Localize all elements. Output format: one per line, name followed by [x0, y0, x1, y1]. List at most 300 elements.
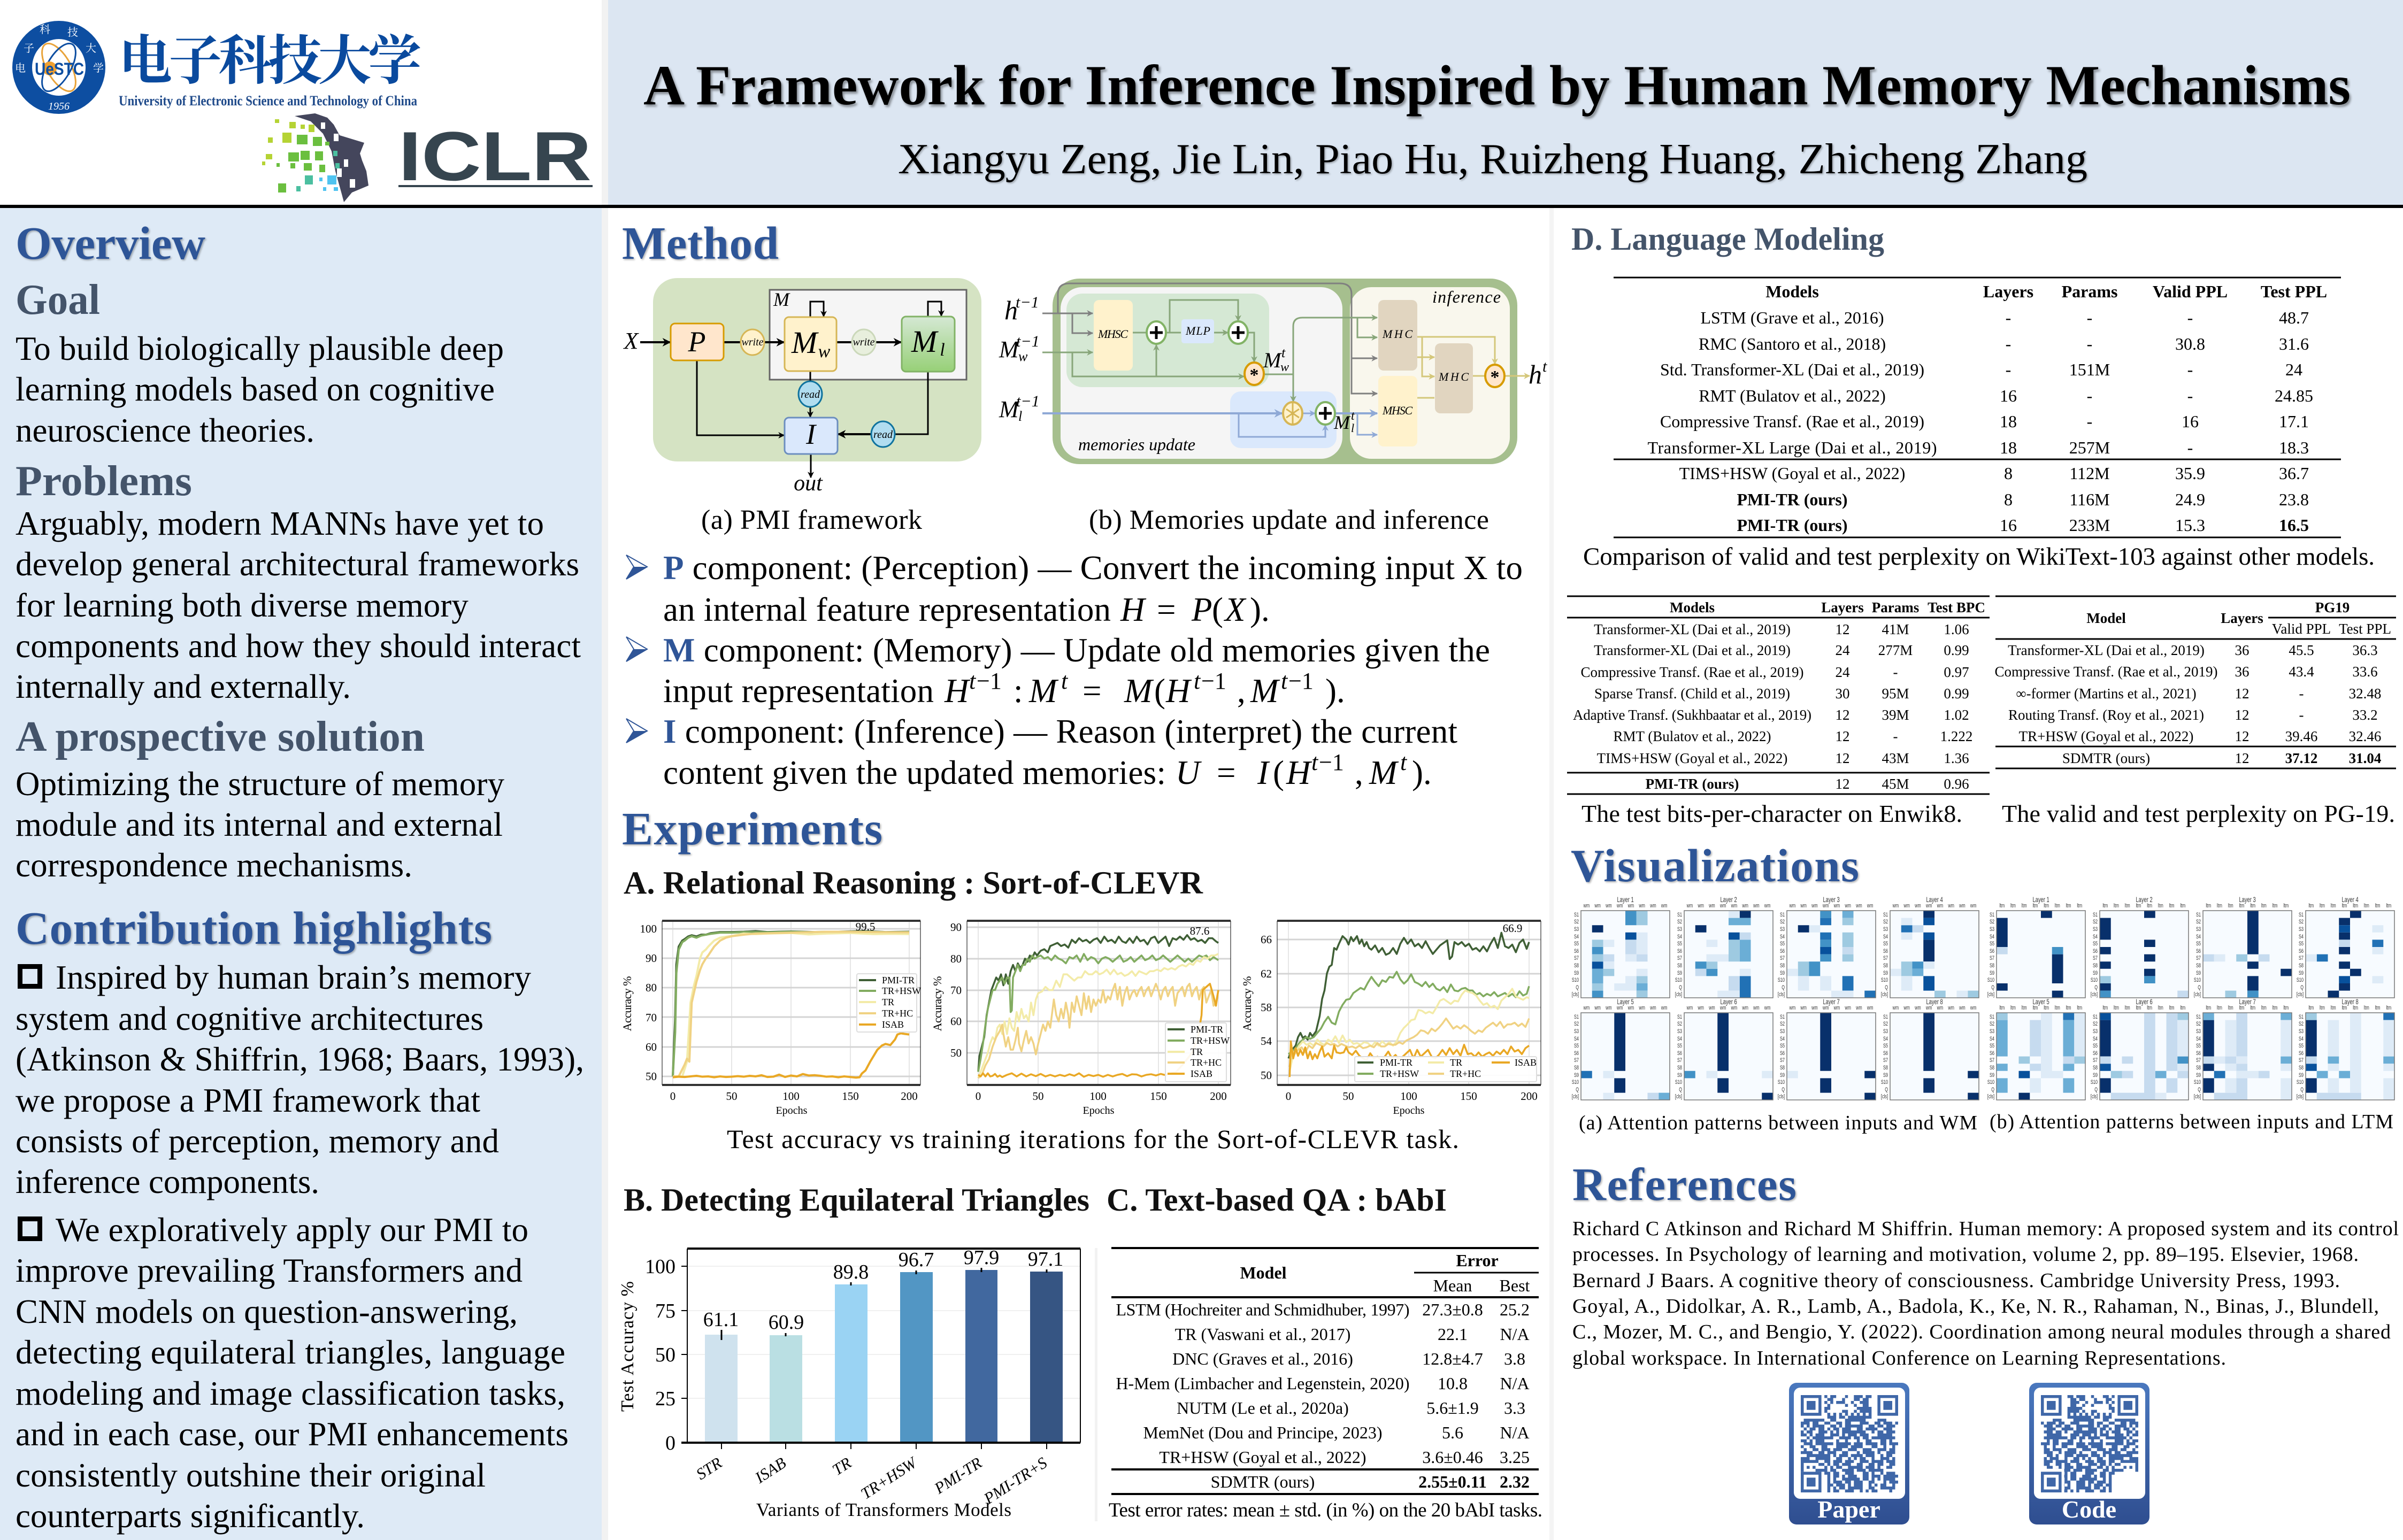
bar chart: transformer variants: 97.1 [1028, 1248, 1063, 1270]
diagram: PMI framework: write [741, 336, 764, 348]
heatmap: LTM layer 6: Layer 6 [2136, 997, 2153, 1006]
header left white area [0, 0, 602, 205]
table: bAbI: Best [1500, 1276, 1530, 1295]
heatmap: LTM layer 8: S9 [2299, 1072, 2304, 1078]
heading: experiments: Experiments [622, 803, 882, 854]
heatmap: LTM layer 3: S1 [2196, 912, 2201, 918]
table: PG-19: Transformer-XL (Dai et al., 2019) [2008, 642, 2205, 658]
contribution 1 [16, 959, 584, 1200]
bullet: M component: t [1194, 668, 1201, 694]
right column separator [1549, 208, 1554, 1540]
heatmap: WM layer 3: S2 [1780, 919, 1785, 925]
panel: overview [16, 217, 584, 1535]
caption: Enwik8: The test bits-per-character on Enwik8. [1581, 800, 1962, 827]
heatmap: LTM layer 5: S10 [1987, 1079, 1994, 1085]
heatmap: LTM layer 1: S5 [1990, 941, 1994, 946]
heatmap: WM layer 3: S7 [1780, 955, 1785, 961]
table: bAbI: 3.6±0.46 [1422, 1447, 1483, 1467]
heatmap: WM layer 6: [cls] [1675, 1094, 1682, 1099]
goal block: learning models based on cognitive [16, 371, 495, 408]
table: WikiText-103: - [2187, 308, 2193, 327]
table: PG-19: 37.12 [2285, 750, 2317, 766]
heatmap: WM layer 5 [1572, 997, 1670, 1100]
heading: visualizations: Visualizations [1571, 840, 1859, 891]
heatmap: WM layer 7: Q [1782, 1087, 1785, 1092]
bullet: I component: H [1286, 754, 1312, 791]
table: Enwik8: Sparse Transf. (Child et al., 2019) [1594, 686, 1790, 702]
line chart 1: 100 [640, 922, 657, 935]
heatmap: LTM layer 6: S3 [2093, 1028, 2098, 1034]
table: Enwik8: 24 [1836, 664, 1850, 680]
heatmap: LTM layer 6: S6 [2093, 1050, 2098, 1056]
diagram: memories update and inference: t−1 [1016, 392, 1040, 410]
diagram: PMI framework: X [623, 328, 640, 354]
heatmap: LTM layer 8: [cls] [2297, 1094, 2304, 1099]
line chart 3: 62 [1261, 967, 1272, 980]
table: WikiText-103: 18.3 [2279, 438, 2309, 457]
bar chart: transformer variants: 75 [655, 1300, 675, 1322]
heatmap: LTM layer 8: S1 [2299, 1014, 2304, 1020]
heatmap: LTM layer 7: ltm ltm ltm ltm ltm ltm ltm ltm [2206, 1005, 2289, 1011]
diagram: memories update and inference: h [1529, 359, 1542, 389]
diagram: memories update and inference: M [1263, 348, 1283, 372]
heatmap: WM layer 3: S9 [1780, 970, 1785, 976]
table: Enwik8: - [1893, 664, 1898, 680]
bullet: I component: I [1257, 754, 1270, 791]
heatmap: LTM layer 5: S1 [1990, 1014, 1994, 1020]
bar chart: transformer variants: 25 [655, 1388, 675, 1410]
heatmap: WM layer 1: S10 [1572, 977, 1579, 983]
contribution 1: Inspired by human brain’s memory [56, 959, 532, 996]
table: Enwik8: Adaptive Transf. (Sukhbaatar et al., 2019) [1573, 707, 1811, 723]
QR card: paper [1789, 1383, 1909, 1524]
heatmap: LTM layer 2: Layer 2 [2136, 895, 2153, 904]
table: Enwik8: Layers [1821, 599, 1864, 615]
heatmap: WM layer 3: S5 [1780, 941, 1785, 946]
heatmap: WM layer 2: S6 [1677, 948, 1682, 954]
heatmap: WM layer 3: wm wm wm wm wm wm wm wm [1789, 903, 1873, 908]
heatmap: WM layer 4 [1881, 895, 1979, 998]
bar chart: transformer variants: TR+HSW [858, 1453, 921, 1503]
bullet: M component: H [944, 672, 971, 710]
table: WikiText-103: - [2087, 308, 2092, 327]
heatmap: LTM layer 6: S8 [2093, 1065, 2098, 1071]
heatmap: LTM layer 6: [cls] [2091, 1094, 2098, 1099]
line chart 3: 54 [1261, 1035, 1272, 1048]
problems block: components and how they should interact [16, 627, 581, 665]
heatmap: WM layer 6: S9 [1677, 1072, 1682, 1078]
table: Enwik8: 0.96 [1944, 776, 1969, 792]
table: WikiText-103: 15.3 [2175, 515, 2205, 535]
table: Enwik8: 0.97 [1944, 664, 1969, 680]
heatmap: LTM layer 3: S6 [2196, 948, 2201, 954]
table: Enwik8: 0.99 [1944, 642, 1969, 658]
line chart 2: 50 [1032, 1090, 1044, 1103]
table: PG-19: PG19 [2315, 599, 2350, 615]
bullet: M component: , [1237, 672, 1246, 710]
heatmap: LTM layer 3: Layer 3 [2239, 895, 2256, 904]
diagram: memories update and inference: M [1333, 412, 1351, 433]
bar chart: transformer variants: 50 [655, 1344, 675, 1366]
bullet: I component: = [1217, 754, 1236, 791]
heatmap: WM layer 2: S3 [1677, 926, 1682, 932]
bullet: I component: , [1355, 754, 1363, 791]
heatmap: LTM layer 1 [1987, 895, 2085, 998]
bar chart: transformer variants: 60.9 [769, 1311, 804, 1334]
heatmap: WM layer 8: Q [1885, 1087, 1888, 1092]
table: Enwik8: Transformer-XL (Dai et al., 2019) [1594, 621, 1791, 637]
diagram: memories update and inference [999, 279, 1547, 464]
heatmap: LTM layer 7: S2 [2196, 1021, 2201, 1027]
heatmap: WM layer 1: S8 [1574, 962, 1579, 968]
heatmap: WM layer 8: S7 [1883, 1057, 1888, 1063]
table: WikiText-103: 16 [2182, 412, 2199, 431]
bar chart: transformer variants [618, 1246, 1080, 1520]
table: WikiText-103: 24.85 [2275, 386, 2313, 405]
table: WikiText-103: 257M [2069, 438, 2110, 457]
table: bAbI: 3.8 [1504, 1349, 1525, 1368]
bar chart: transformer variants: Variants of Transformers Models [756, 1499, 1011, 1520]
heatmap: LTM layer 5: ltm ltm ltm ltm ltm ltm ltm ltm [1999, 1005, 2082, 1011]
heatmap: LTM layer 7 [2194, 997, 2292, 1100]
diagram: PMI framework: w [818, 342, 831, 361]
legend [857, 974, 921, 1032]
table: bAbI: N/A [1500, 1325, 1530, 1344]
heatmap: LTM layer 8: S10 [2297, 1079, 2304, 1085]
university name chinese: 电子科技大学 [119, 18, 421, 95]
heatmap: WM layer 5: S4 [1574, 1036, 1579, 1042]
heatmap: WM layer 1: wm wm wm wm wm wm wm wm [1583, 903, 1667, 908]
diagram: PMI framework: M [773, 289, 790, 310]
bullet: I component: content given the updated memories: [663, 754, 1166, 791]
diagram: memories update and inference: h [1004, 295, 1018, 325]
heatmap: LTM layer 7: Layer 7 [2239, 997, 2256, 1006]
heatmap: WM layer 6: S1 [1677, 1014, 1682, 1020]
references list: Goyal, A., Didolkar, A. R., Lamb, A., Badola, K., Ke, N. R., Rahaman, N., Binas, J., Blundell, [1572, 1295, 2379, 1318]
heatmap: WM layer 6: S5 [1677, 1043, 1682, 1049]
contribution 2: improve prevailing Transformers and [16, 1252, 523, 1289]
heatmap: WM layer 4: S5 [1883, 941, 1888, 946]
heatmap: LTM layer 4: S5 [2299, 941, 2304, 946]
bullet: P component: an internal feature representation [663, 591, 1111, 628]
table: bAbI: SDMTR (ours) [1211, 1472, 1315, 1491]
heatmap: LTM layer 7: S1 [2196, 1014, 2201, 1020]
table: bAbI: 2.32 [1500, 1472, 1530, 1491]
heatmap: WM layer 8: S5 [1883, 1043, 1888, 1049]
QR card: paper: Paper [1817, 1496, 1880, 1523]
bar chart: transformer variants: Test Accuracy % [618, 1281, 638, 1412]
references list: Bernard J Baars. A cognitive theory of consciousness. Cambridge University Press, 1993. [1572, 1269, 2340, 1292]
diagram: PMI framework: read [873, 429, 893, 441]
heatmap: LTM layer 2: Q [2094, 984, 2098, 990]
table: WikiText-103: 30.8 [2175, 334, 2205, 353]
bar chart: transformer variants: PMI-TR [931, 1454, 985, 1498]
heatmap: WM layer 3: S6 [1780, 948, 1785, 954]
table: WikiText-103: RMT (Bulatov et al., 2022) [1699, 386, 1886, 405]
bullet: I component: ( [1273, 754, 1284, 791]
heatmap: WM layer 6: S2 [1677, 1021, 1682, 1027]
heatmap: WM layer 7: wm wm wm wm wm wm wm wm [1789, 1005, 1873, 1011]
table: PG-19: 43.4 [2289, 664, 2314, 680]
table: bAbI: 25.2 [1500, 1300, 1530, 1319]
bar chart: transformer variants: 0 [665, 1432, 675, 1454]
bar chart: transformer variants: 100 [645, 1256, 675, 1278]
heatmap: LTM layer 4: Layer 4 [2341, 895, 2359, 904]
table: WikiText-103: - [2187, 438, 2193, 457]
diagram: memories update and inference: MHSC [1382, 404, 1412, 417]
heatmap: LTM layer 3: S2 [2196, 919, 2201, 925]
bullet: P component: H [1120, 591, 1147, 628]
contribution 2: CNN models on question-answering, [16, 1293, 518, 1330]
table: Enwik8: - [1893, 728, 1898, 744]
diagram: memories update and inference: M [999, 396, 1020, 422]
heatmap: WM layer 8: S1 [1883, 1014, 1888, 1020]
bullet: P component: P component: (Perception) — Convert the incoming input X to [663, 549, 1523, 587]
line chart 3: Accuracy % [1240, 976, 1254, 1031]
icon: head [262, 113, 368, 202]
table: PG-19: ∞-former (Martins et al., 2021) [2016, 686, 2197, 702]
heatmap: WM layer 2: Q [1679, 984, 1682, 990]
line chart 1: Epochs [776, 1105, 808, 1116]
legend: TR+HSW [1191, 1035, 1230, 1046]
heatmap: WM layer 8: S6 [1883, 1050, 1888, 1056]
table: WikiText-103: 18 [2000, 438, 2017, 457]
heatmap: WM layer 3: S8 [1780, 962, 1785, 968]
contribution 1: consists of perception, memory and [16, 1122, 499, 1160]
table: PG-19: Valid PPL [2272, 621, 2331, 637]
subheading A: A. Relational Reasoning : Sort-of-CLEVR [624, 865, 1203, 900]
table: Enwik8: TIMS+HSW (Goyal et al., 2022) [1597, 750, 1787, 766]
heatmap: WM layer 5: S6 [1574, 1050, 1579, 1056]
table: WikiText-103: 48.7 [2279, 308, 2309, 327]
table: Enwik8: 24 [1836, 642, 1850, 658]
heatmap: LTM layer 3: Q [2198, 984, 2201, 990]
method component bullets [626, 549, 1523, 791]
heatmap: LTM layer 5: S5 [1990, 1043, 1994, 1049]
bullet: M component: −1 [1201, 668, 1226, 694]
heatmap: LTM layer 5: S8 [1990, 1065, 1994, 1071]
table: PG-19 [1995, 596, 2396, 768]
goal block: Goal [16, 276, 100, 324]
line chart 2: 80 [950, 952, 962, 965]
line chart 2: 70 [950, 984, 962, 997]
diagram: PMI framework: I [805, 418, 817, 450]
heatmap: LTM layer 1: S6 [1990, 948, 1994, 954]
table: bAbI: LSTM (Hochreiter and Schmidhuber, 1997) [1116, 1300, 1410, 1319]
heatmap: WM layer 6: Q [1679, 1087, 1682, 1092]
contribution 1: inference components. [16, 1163, 319, 1200]
bullet: M component: M [1124, 672, 1154, 710]
heatmap: WM layer 3: S1 [1780, 912, 1785, 918]
table: bAbI: Model [1240, 1263, 1287, 1282]
title: A Framework for Inference Inspired by Human Memory Mechanisms [643, 54, 2351, 117]
heatmap: WM layer 5: wm wm wm wm wm wm wm wm [1583, 1005, 1667, 1011]
line chart 2: 60 [950, 1015, 962, 1028]
line chart 2: 90 [950, 921, 962, 934]
heatmap: LTM layer 1: [cls] [1987, 991, 1994, 997]
table: bAbI: TR+HSW (Goyal et al., 2022) [1159, 1447, 1366, 1467]
heatmap: WM layer 7 [1778, 997, 1876, 1100]
heatmap: LTM layer 5: S2 [1990, 1021, 1994, 1027]
heatmap: LTM layer 2: S8 [2093, 962, 2098, 968]
line chart 1: 100 [782, 1090, 800, 1103]
table: Enwik8: 39M [1882, 707, 1909, 723]
subheading C: C. Text-based QA : bAbI [1107, 1182, 1447, 1218]
heatmap: WM layer 4: S9 [1883, 970, 1888, 976]
heatmap: WM layer 7: S4 [1780, 1036, 1785, 1042]
line chart 3: 66 [1261, 933, 1272, 946]
table: WikiText-103: 233M [2069, 515, 2110, 535]
table: Enwik8: RMT (Bulatov et al., 2022) [1614, 728, 1771, 744]
table: Enwik8: 1.02 [1944, 707, 1969, 723]
bullet: M component: −1 [977, 668, 1002, 694]
table: Enwik8: 12 [1836, 621, 1849, 637]
heatmap: WM layer 5: [cls] [1572, 1094, 1579, 1099]
table: bAbI: TR (Vaswani et al., 2017) [1175, 1325, 1350, 1344]
seal: 技 [67, 26, 78, 38]
table: WikiText-103: Params [2062, 282, 2117, 301]
problems block: Arguably, modern MANNs have yet to [16, 505, 544, 542]
heatmap: LTM layer 2: S4 [2093, 934, 2098, 940]
heatmap: LTM layer 4: S3 [2299, 926, 2304, 932]
heatmap: WM layer 6: S8 [1677, 1065, 1682, 1071]
heatmap: LTM layer 1: S7 [1990, 955, 1994, 961]
line chart 3: Epochs [1393, 1105, 1425, 1116]
heatmap: WM layer 5: S10 [1572, 1079, 1579, 1085]
diagram: PMI framework: M [911, 324, 939, 359]
bullet: M component: −1 [1288, 668, 1314, 694]
contribution 2: and in each case, our PMI enhancements [16, 1415, 569, 1453]
table: PG-19: 32.48 [2349, 686, 2381, 702]
heatmap: WM layer 8: S4 [1883, 1036, 1888, 1042]
legend: TR+HC [1191, 1057, 1222, 1068]
heatmap: WM layer 1: [cls] [1572, 991, 1579, 997]
table: Enwik8: 1.36 [1944, 750, 1969, 766]
table: PG-19: Layers [2221, 610, 2263, 626]
table: Enwik8: 41M [1882, 621, 1909, 637]
caption: sort-of-CLEVR: Test accuracy vs training iterations for the Sort-of-CLEVR task. [727, 1124, 1459, 1154]
heatmap: WM layer 7: S9 [1780, 1072, 1785, 1078]
table: Enwik8: 277M [1878, 642, 1913, 658]
table: PG-19: 12 [2235, 707, 2250, 723]
heatmap: LTM layer 1: S3 [1990, 926, 1994, 932]
heatmap: LTM layer 4: S10 [2297, 977, 2304, 983]
prospective solution block: correspondence mechanisms. [16, 846, 412, 884]
legend: TR [1191, 1046, 1203, 1057]
heatmap: WM layer 8: S2 [1883, 1021, 1888, 1027]
table: bAbI: 22.1 [1438, 1325, 1468, 1344]
line chart 2: Epochs [1083, 1105, 1115, 1116]
heatmap: LTM layer 1: S8 [1990, 962, 1994, 968]
bullet: M component: M [1028, 672, 1059, 710]
legend: TR+HC [882, 1008, 913, 1019]
heatmap: WM layer 5: S7 [1574, 1057, 1579, 1063]
university name english: University of Electronic Science and Technology of China [119, 93, 417, 109]
heatmap: WM layer 4: S1 [1883, 912, 1888, 918]
divider [1095, 1248, 1097, 1521]
table: PG-19: Routing Transf. (Roy et al., 2021) [2008, 707, 2204, 723]
heatmap: WM layer 8: S9 [1883, 1072, 1888, 1078]
heatmap: WM layer 5: S5 [1574, 1043, 1579, 1049]
table: PG-19: 36.3 [2352, 642, 2378, 658]
heatmap: LTM layer 4 [2297, 895, 2394, 998]
heatmap: WM layer 3: [cls] [1778, 991, 1785, 997]
heatmap: LTM layer 3: S5 [2196, 941, 2201, 946]
legend: ISAB [1515, 1057, 1537, 1068]
heatmap: WM layer 7: S8 [1780, 1065, 1785, 1071]
heatmap: LTM layer 2: ltm ltm ltm ltm ltm ltm ltm ltm [2102, 903, 2185, 908]
subheading B: B. Detecting Equilateral Triangles [624, 1182, 1089, 1218]
table: PG-19: TR+HSW (Goyal et al., 2022) [2019, 728, 2193, 744]
diagram: memories update and inference: l [1018, 409, 1022, 424]
diagram: memories update and inference: t−1 [1016, 294, 1039, 311]
bar chart: transformer variants: 96.7 [899, 1249, 934, 1271]
table: WikiText-103: 8 [2004, 464, 2013, 483]
legend [1165, 1023, 1230, 1082]
table: PG-19: 32.46 [2349, 728, 2381, 744]
line chart 1: 50 [726, 1090, 737, 1103]
heatmap: WM layer 4: S3 [1883, 926, 1888, 932]
heatmap: LTM layer 6: S1 [2093, 1014, 2098, 1020]
bullet: P component: ( [1212, 591, 1223, 628]
diagram: PMI framework: l [940, 340, 945, 360]
table: WikiText-103: - [2187, 360, 2193, 379]
heatmap: LTM layer 5: [cls] [1987, 1094, 1994, 1099]
heatmap: LTM layer 4: [cls] [2297, 991, 2304, 997]
heatmap: WM layer 5: Layer 5 [1617, 997, 1634, 1006]
bullet: I component: I component: (Inference) — Reason (interpret) the current [663, 713, 1457, 750]
heatmap: LTM layer 2: S5 [2093, 941, 2098, 946]
table: WikiText-103: Layers [1983, 282, 2033, 301]
bullet: I component: ). [1412, 754, 1432, 791]
heatmap: LTM layer 6: S4 [2093, 1036, 2098, 1042]
contribution 2: We exploratively apply our PMI to [56, 1211, 528, 1249]
heatmap: WM layer 2: wm wm wm wm wm wm wm wm [1686, 903, 1770, 908]
heatmap: LTM layer 7: S7 [2196, 1057, 2201, 1063]
heatmap: WM layer 1: S5 [1574, 941, 1579, 946]
heatmap: WM layer 7: S7 [1780, 1057, 1785, 1063]
seal: 电 [15, 62, 26, 74]
table: WikiText-103: TIMS+HSW (Goyal et al., 2022) [1679, 464, 1905, 483]
heatmap: WM layer 1: Q [1576, 984, 1579, 990]
seal: 子 [24, 43, 34, 55]
heatmap: WM layer 7: Layer 7 [1823, 997, 1840, 1006]
diagram: memories update and inference: l [1351, 421, 1354, 435]
heatmap: WM layer 4: S8 [1883, 962, 1888, 968]
heatmap: WM layer 5: Q [1576, 1087, 1579, 1092]
table: bAbI: 3.25 [1500, 1447, 1530, 1467]
heatmap: LTM layer 7: S5 [2196, 1043, 2201, 1049]
table: WikiText-103: 16.5 [2279, 515, 2309, 535]
legend: ISAB [882, 1019, 904, 1030]
diagram: PMI framework: read [801, 389, 820, 401]
table: PG-19: Test PPL [2339, 621, 2391, 637]
prospective solution block: Optimizing the structure of memory [16, 765, 505, 803]
contribution 2: consistently outshine their original [16, 1457, 486, 1494]
table: Enwik8: Params [1872, 599, 1919, 615]
table: WikiText-103: RMC (Santoro et al., 2018) [1699, 334, 1886, 353]
bar chart: transformer variants: PMI-TR+S [980, 1454, 1050, 1508]
heatmap: LTM layer 4: S9 [2299, 970, 2304, 976]
legend: TR+HC [1450, 1068, 1481, 1079]
problems block: for learning both diverse memory [16, 587, 469, 624]
heatmap: WM layer 5: S8 [1574, 1065, 1579, 1071]
prospective solution block: module and its internal and external [16, 806, 503, 843]
table: bAbI: 5.6 [1442, 1423, 1463, 1442]
table: bAbI: N/A [1500, 1423, 1530, 1442]
heatmap: LTM layer 2 [2091, 895, 2189, 998]
heatmap: WM layer 6: S6 [1677, 1050, 1682, 1056]
